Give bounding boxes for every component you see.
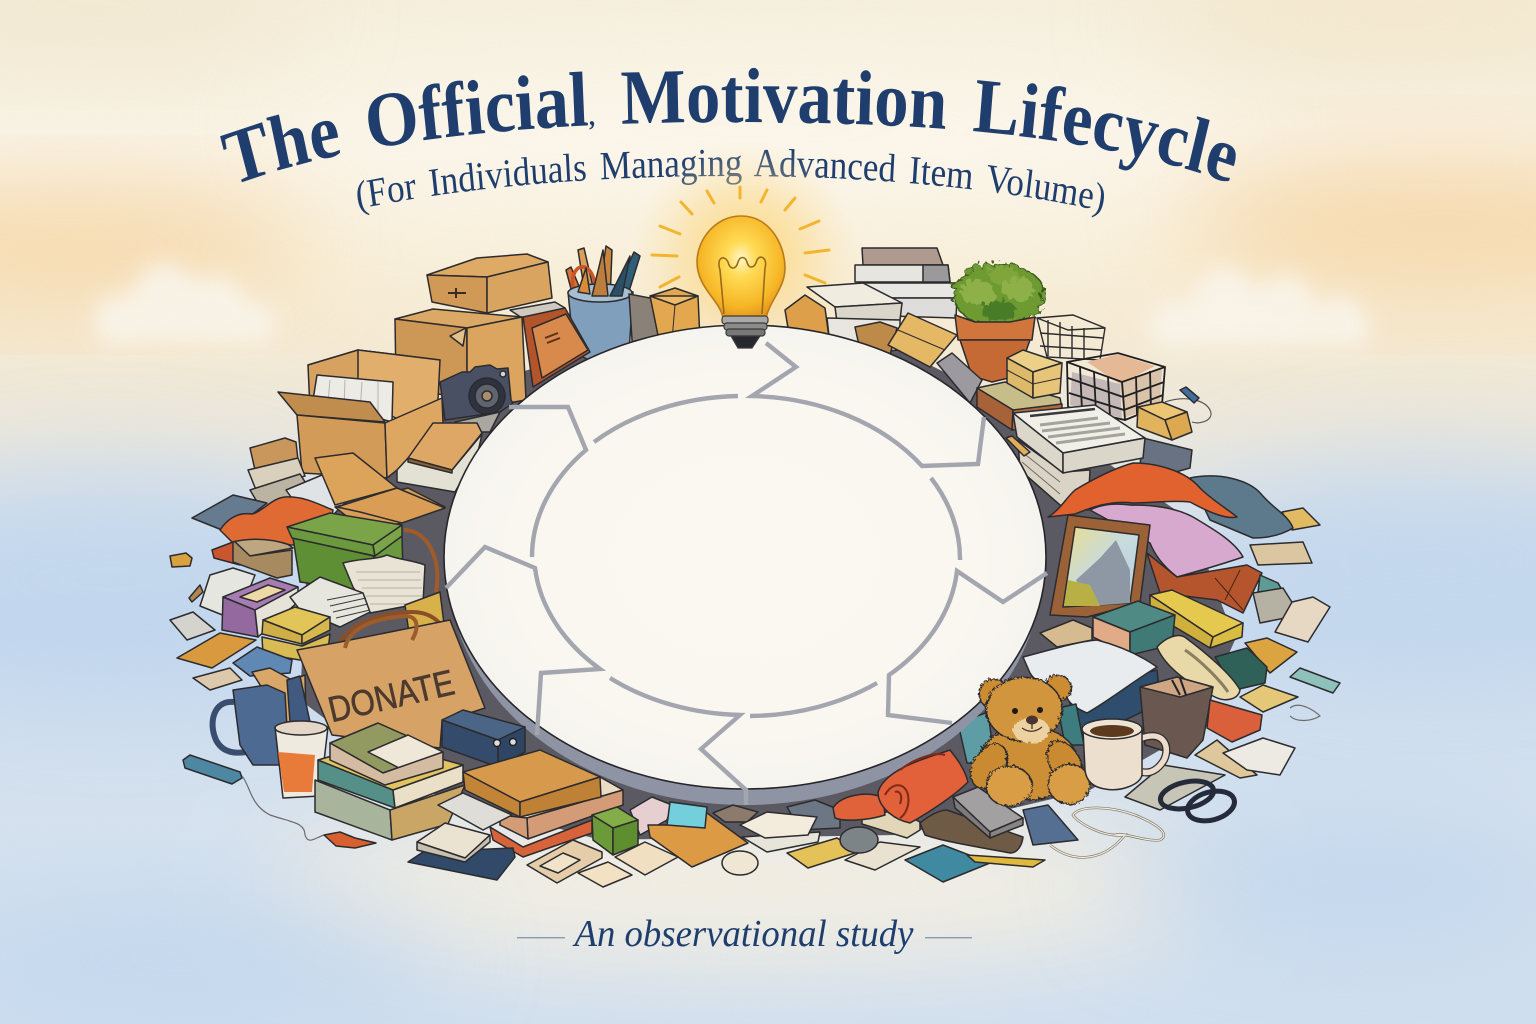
bottom row: green cube (592, 807, 638, 855)
tan flat card (193, 668, 242, 690)
earphone wire (1050, 808, 1164, 857)
tan flat box (1040, 620, 1092, 647)
open book with printed page (1013, 405, 1145, 473)
left lower pile: green bin, paper, donate bag, mug (170, 488, 485, 765)
orange blanket (1048, 463, 1237, 518)
bottom row: white flat book (438, 793, 512, 830)
white paper stack (807, 283, 902, 352)
pencil cup with pencils (566, 246, 640, 364)
bottom green book (315, 780, 392, 840)
teal USB stick (1290, 668, 1340, 693)
white crumpled paper (1223, 738, 1295, 775)
red-brown parcel (1147, 553, 1262, 613)
subtitle: curved parenthetical: (For Individuals Managing Advanced Item Volume) (357, 149, 1104, 218)
picture frame with mountain (1050, 515, 1150, 617)
front right pile: teddy, mug, box, scissors, small objects (740, 636, 1340, 882)
dark green box (1215, 648, 1267, 690)
teddy legs (985, 765, 1031, 805)
red box right (1207, 700, 1262, 742)
orange cloth (220, 497, 333, 545)
footer: italic caption: An observational study (572, 913, 914, 955)
bottom row: tan tile two (615, 842, 678, 875)
gold chip (170, 553, 192, 567)
yellow box behind bag (405, 592, 446, 640)
grey book right (1253, 588, 1300, 623)
thin cable (242, 776, 324, 840)
teal block behind teddy (958, 712, 995, 765)
yellow box (262, 607, 330, 660)
front left pile: glass, books, navy box, bottom objects (183, 710, 758, 887)
left upper pile: cardboard boxes, pencils, camera (248, 246, 700, 535)
arc right (931, 478, 960, 560)
teal sliver (1258, 575, 1282, 592)
bag label text: DONATE (324, 661, 458, 730)
title: curved main heading: The Official, Motivation Lifecycle (220, 68, 1236, 182)
small stacked books far left (248, 438, 350, 516)
wire basket back (1037, 315, 1105, 360)
paper under scissors (1125, 765, 1225, 810)
brown gift box (1140, 677, 1213, 758)
arrow segment lower right (888, 571, 1047, 723)
yellow paper (1240, 685, 1298, 712)
white cloth (1023, 640, 1157, 713)
yellow strip (967, 855, 1045, 867)
white cube (200, 568, 255, 616)
grey box under open book (1140, 438, 1192, 475)
purple box (222, 578, 298, 637)
blue USB with cord (1165, 387, 1211, 423)
arrow segment from bulb to upper right (752, 343, 984, 466)
red box left (212, 542, 240, 565)
bottom row: tan tile (578, 862, 632, 887)
wire basket front with contents (1067, 353, 1165, 420)
red book behind (510, 302, 590, 387)
grey and white book stack (855, 248, 957, 318)
right middle pile: cloths, picture frame, boxes (958, 463, 1330, 765)
yellow hinged box (1150, 590, 1243, 648)
blue mug with tan rucksack (213, 668, 310, 765)
bottom row: navy tablet (408, 848, 515, 880)
orange cloth pillow (833, 794, 885, 820)
flat orange books (315, 453, 445, 535)
black scissors handles (1158, 777, 1238, 826)
blue card (905, 845, 990, 882)
glass with orange drink (275, 721, 328, 798)
pink cloth (1090, 504, 1243, 577)
top cardboard box (427, 254, 552, 313)
gold small box (1137, 402, 1192, 440)
bulb glass (697, 216, 785, 318)
green storage bin (287, 513, 403, 592)
bottom row: brown stone (713, 805, 758, 822)
large cardboard box (395, 309, 526, 410)
bottom row: red box (490, 820, 592, 857)
small scissors (1290, 705, 1320, 720)
open cardboard box with papers (278, 350, 443, 478)
brown shoe (920, 810, 1023, 853)
blue mouse (1023, 805, 1078, 845)
bottom row: orange flat folder (648, 813, 748, 867)
navy box (442, 710, 525, 767)
cream hat (1157, 636, 1240, 700)
grey lump (787, 800, 840, 830)
light bulb with rays (652, 187, 829, 348)
small grey card (170, 612, 215, 640)
teddy head (985, 676, 1061, 740)
tag on string (189, 585, 203, 602)
teal book (318, 760, 395, 808)
right upper pile: book stacks, plant, wire baskets (785, 248, 1211, 510)
footer line right (925, 937, 972, 938)
slate pillow (1190, 476, 1293, 538)
bottom row: tan frame tray (527, 840, 602, 883)
yellow cube and brown box (977, 350, 1062, 430)
grey wedge under camera (455, 412, 500, 432)
terracotta pot (955, 315, 1035, 382)
tan shoebox (233, 530, 293, 578)
yellow folder (787, 838, 858, 868)
blue flat object (233, 647, 292, 676)
top open book (330, 723, 443, 773)
mottled stone (840, 827, 878, 853)
footer line left (517, 937, 565, 938)
gold flat (1245, 638, 1297, 673)
teal box (1093, 601, 1175, 655)
arrow segment lower left (446, 547, 600, 735)
rays (652, 187, 829, 287)
paper stack (343, 555, 425, 613)
slate flat book (192, 495, 267, 530)
tan book under cloth (862, 810, 920, 838)
navy garment (1067, 670, 1160, 740)
paper sheet (1275, 597, 1330, 642)
teddy body (977, 725, 1077, 799)
arc top left (594, 396, 738, 442)
yellow tag (1282, 508, 1320, 530)
bottom row: big orange box (463, 750, 601, 817)
bulb screw base (722, 316, 768, 348)
lower book stacks (1018, 440, 1090, 510)
gold clip (1006, 436, 1030, 456)
central white disc (444, 325, 1046, 789)
disc shadow rim (449, 339, 1041, 805)
teddy face (1012, 707, 1043, 731)
bag handle behind paper (404, 530, 437, 592)
paper scrap (845, 842, 920, 870)
arrow segment bottom (610, 678, 746, 805)
white envelope (740, 812, 820, 852)
bottom row: pebble (722, 851, 758, 875)
stack of books (315, 723, 465, 840)
grey book by bulb (629, 294, 666, 355)
grey prism (937, 353, 982, 403)
bottom row: white book stack (417, 823, 490, 862)
shadow mass under item piles (300, 350, 1235, 840)
camera (440, 365, 513, 420)
bottom row: pink block (630, 797, 672, 835)
teddy ears (978, 678, 1008, 708)
teddy bear (962, 674, 1089, 805)
small orange box near bulb (785, 295, 830, 345)
bottom row: teal block (667, 802, 707, 828)
inhaler device (183, 755, 242, 784)
red plug (324, 832, 376, 848)
tan box right (1250, 542, 1312, 565)
small gold boxes by bulb (650, 288, 700, 345)
cycle path: eight arrow segments on the disc (446, 343, 1047, 805)
bottom row: peach box (500, 777, 623, 839)
grey book (953, 787, 1023, 838)
gold slanted box (888, 313, 957, 367)
coffee mug (1082, 719, 1166, 790)
arc left (509, 407, 586, 557)
donate bag (297, 612, 485, 748)
plant foliage (950, 261, 1042, 323)
rolled orange cloth (878, 750, 968, 823)
tan book with pages (397, 423, 482, 492)
orange boxes by disc (337, 488, 445, 523)
filament (719, 257, 766, 314)
tan lump (855, 322, 897, 355)
white box with stacked pages (290, 577, 370, 627)
tan wrap paper (1195, 740, 1257, 778)
arc bottom right (750, 683, 877, 716)
glow behind light bulb (630, 140, 860, 370)
orange flat folder (177, 633, 256, 668)
